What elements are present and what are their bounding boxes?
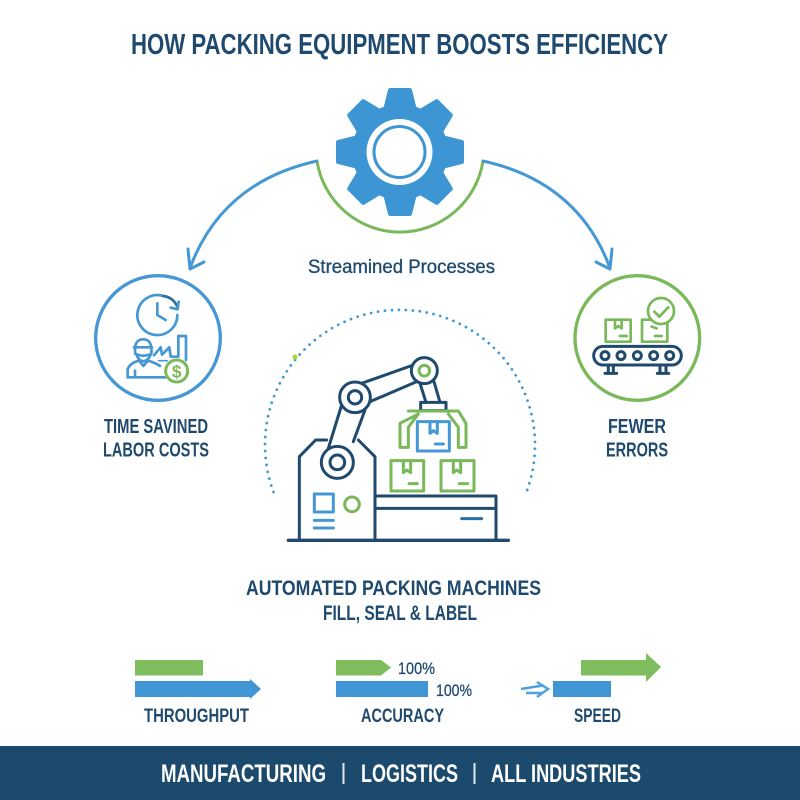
panel: time savings icon — [96, 276, 220, 400]
footer band: ALL INDUSTRIES — [491, 760, 641, 788]
label: time saved and labor costs — [103, 416, 209, 462]
label: time saved and labor costs: LABOR COSTS — [103, 440, 209, 462]
arrow: gear to time savings — [188, 161, 317, 269]
green arc under gear — [317, 161, 483, 232]
stray dot on arc — [292, 354, 298, 360]
arrow: gear to fewer errors — [483, 161, 612, 269]
footer band: MANUFACTURING — [161, 760, 326, 788]
illustration: robotic packing machine — [288, 358, 508, 540]
chart: accuracy: ACCURACY — [361, 705, 444, 727]
panel: fewer errors icon — [575, 276, 700, 400]
label: fewer errors: ERRORS — [606, 440, 668, 462]
chart: speed: SPEED — [574, 705, 621, 727]
footer band — [0, 746, 800, 800]
label: time saved and labor costs: TIME SAVINED — [104, 416, 208, 438]
chart: accuracy — [336, 659, 472, 727]
chart: accuracy: 100% — [436, 681, 472, 700]
heading: streamlined processes: Streamined Processes — [308, 256, 495, 278]
panel: time savings icon: $ — [172, 361, 182, 381]
chart: accuracy: 100% — [398, 659, 435, 678]
heading: automated packing machines: AUTOMATED PACKING MACHINES — [246, 576, 541, 600]
icon: central gear — [336, 88, 464, 216]
subheading: fill seal label: FILL, SEAL & LABEL — [323, 602, 477, 625]
chart: speed — [521, 653, 661, 727]
footer band: LOGISTICS — [361, 760, 458, 788]
dotted arc around robot — [265, 310, 535, 492]
label: fewer errors: FEWER — [608, 416, 666, 438]
chart: throughput: THROUGHPUT — [144, 705, 249, 727]
label: fewer errors — [606, 416, 668, 462]
chart: throughput — [135, 660, 261, 727]
